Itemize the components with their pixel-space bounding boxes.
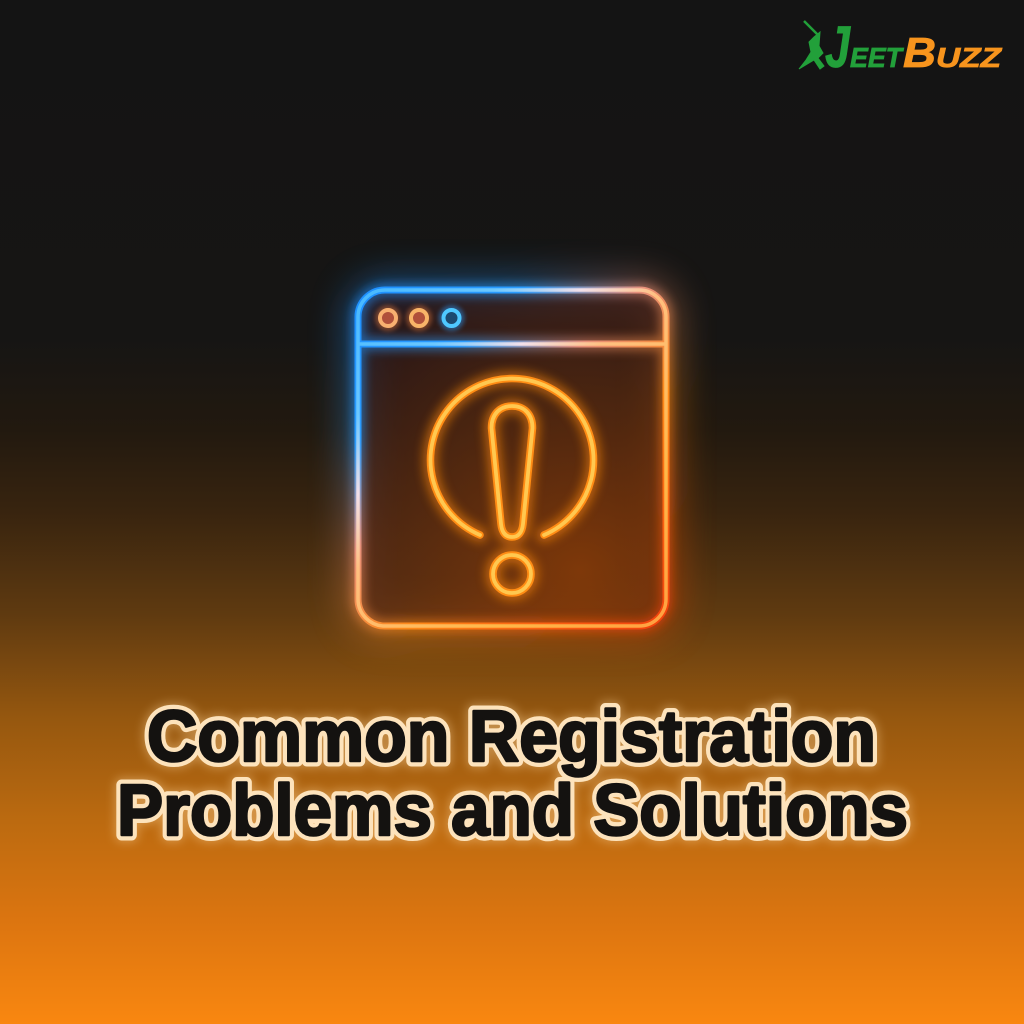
logo wordmark: J [825, 15, 851, 80]
dot two [406, 305, 432, 331]
title glow: Problems and Solutions [117, 771, 908, 851]
title line one: Common Registration [147, 697, 876, 777]
dot three [438, 305, 464, 331]
neon browser window warning icon [358, 290, 666, 626]
outer ambient glow [358, 290, 666, 626]
logo wordmark [825, 15, 1002, 80]
warning circle and exclamation mark [430, 379, 594, 593]
title line two: Problems and Solutions [117, 771, 908, 851]
title line one: Common Registration [147, 697, 876, 777]
window frame [358, 290, 666, 626]
logo wordmark: UZZ [936, 42, 1002, 73]
logo [799, 15, 1002, 80]
title glow [117, 697, 908, 851]
window interior tint [358, 290, 666, 626]
icon: cricket player [799, 21, 824, 69]
title glow: Common Registration [147, 697, 876, 777]
title line two: Problems and Solutions [117, 771, 908, 851]
logo wordmark: B [903, 29, 936, 76]
title [117, 697, 908, 851]
title bar dots [375, 305, 464, 331]
logo wordmark: EET [850, 42, 905, 73]
dot one [375, 305, 401, 331]
window frame glow [358, 290, 666, 626]
window frame core [358, 290, 666, 626]
